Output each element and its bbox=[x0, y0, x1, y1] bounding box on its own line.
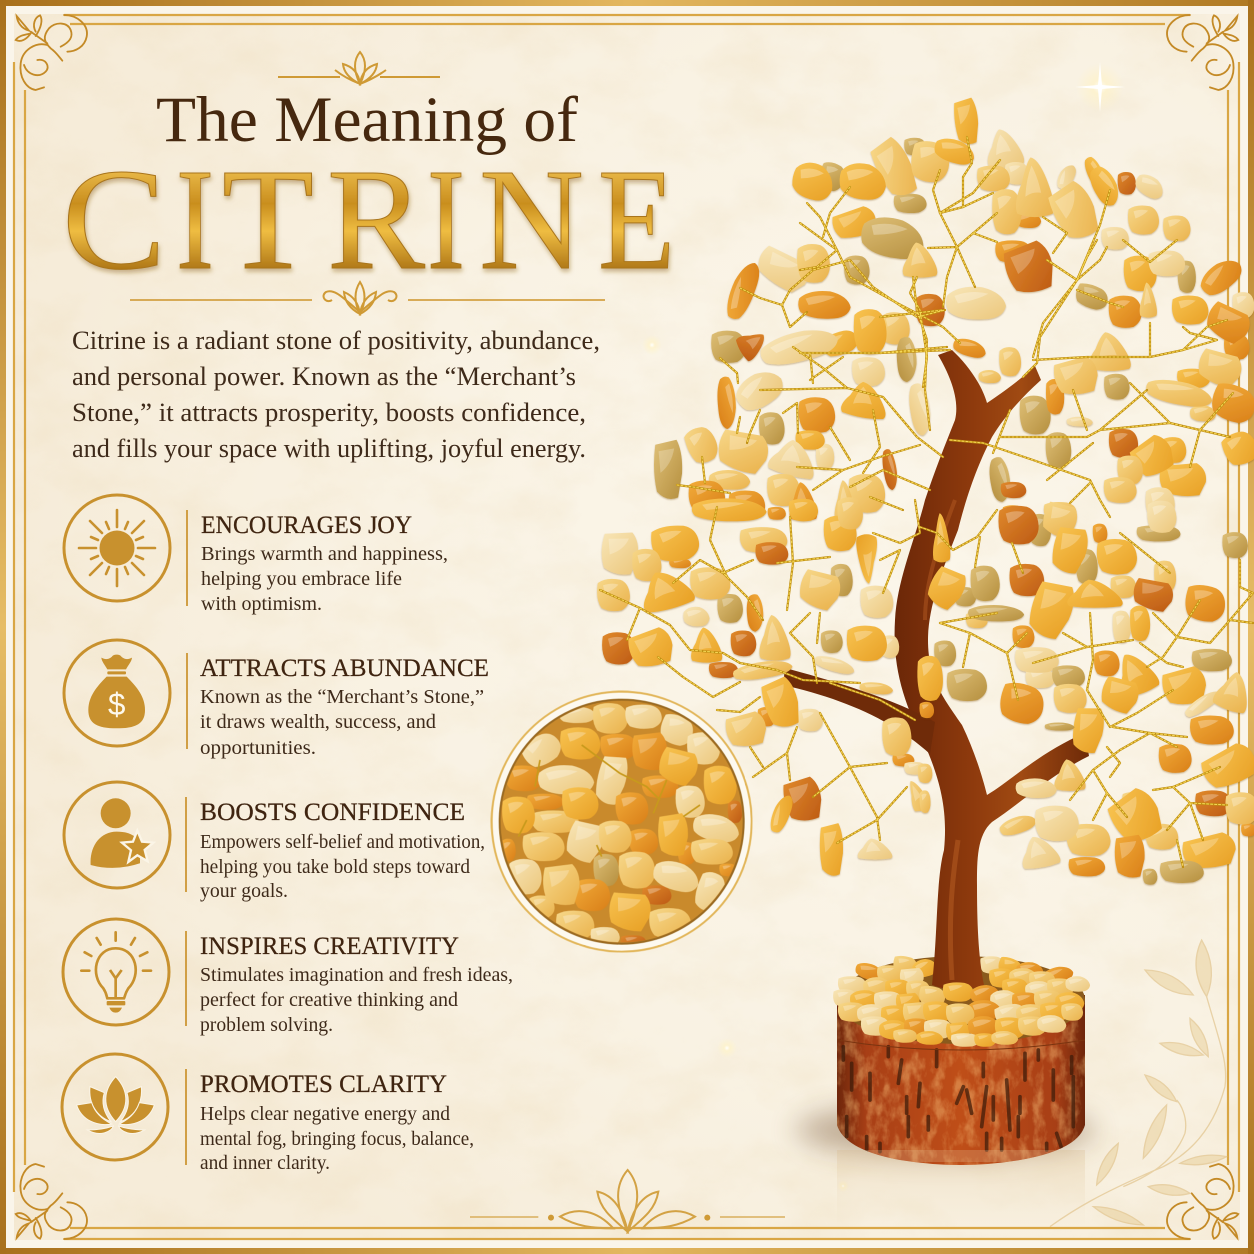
inset circle of citrine stones bbox=[492, 692, 752, 952]
stones: inset front bbox=[502, 703, 742, 946]
tree stones bbox=[597, 97, 1254, 885]
heading: CITRINE: R bbox=[327, 140, 425, 300]
intro paragraph: Citrine is a radiant stone of positivity, abundance, bbox=[72, 326, 600, 355]
icon: money bag: $ bbox=[108, 687, 125, 722]
item: inspires creativity: Stimulates imagination and fresh ideas, bbox=[200, 964, 513, 986]
heading: CITRINE bbox=[62, 140, 675, 300]
sparkles bbox=[642, 62, 1125, 1192]
stones: crown top bbox=[788, 97, 1190, 263]
item: boosts confidence: helping you take bold steps toward bbox=[200, 856, 470, 878]
intro paragraph bbox=[72, 326, 600, 463]
item: encourages joy: Brings warmth and happiness, bbox=[201, 543, 448, 565]
item: attracts abundance bbox=[64, 640, 489, 759]
item: attracts abundance: ATTRACTS ABUNDANCE bbox=[200, 655, 489, 682]
stones: inset back bbox=[501, 707, 742, 948]
icon: sun bbox=[64, 495, 170, 601]
stones: crown upper left bbox=[654, 242, 945, 523]
bottom ornament bbox=[470, 1170, 785, 1232]
intro paragraph: and fills your space with uplifting, joyful energy. bbox=[72, 434, 586, 463]
pot base bbox=[837, 956, 1085, 1170]
divider ornament bbox=[130, 282, 605, 314]
item: inspires creativity: INSPIRES CREATIVITY bbox=[200, 933, 459, 960]
item: boosts confidence: BOOSTS CONFIDENCE bbox=[200, 799, 465, 826]
intro paragraph: and personal power. Known as the “Merchant’s bbox=[72, 362, 576, 391]
trunk bbox=[783, 350, 1089, 990]
item: promotes clarity: and inner clarity. bbox=[200, 1152, 330, 1174]
item: inspires creativity: perfect for creative thinking and bbox=[200, 989, 458, 1011]
gravel front bbox=[833, 982, 1084, 1047]
stones: crown lower right bbox=[917, 498, 1254, 885]
item: promotes clarity bbox=[62, 1054, 474, 1174]
item: encourages joy: ENCOURAGES JOY bbox=[201, 512, 412, 539]
item: attracts abundance: it draws wealth, success, and bbox=[200, 711, 436, 733]
stones: crown lower left bbox=[597, 497, 931, 876]
item: attracts abundance: Known as the “Merchant’s Stone,” bbox=[200, 686, 484, 708]
icon: money bag bbox=[64, 640, 170, 746]
top ornament bbox=[278, 52, 440, 84]
heading: CITRINE: N bbox=[479, 140, 584, 300]
icon: lotus bbox=[62, 1054, 168, 1160]
item: encourages joy: helping you embrace life bbox=[201, 568, 402, 590]
heading: CITRINE: I bbox=[176, 140, 214, 300]
icon: person with star bbox=[64, 782, 170, 888]
stones: crown upper right bbox=[946, 238, 1254, 521]
heading: CITRINE: C bbox=[62, 140, 166, 300]
shadow and reflection under base bbox=[795, 1104, 1095, 1230]
heading: CITRINE: T bbox=[222, 140, 314, 300]
icon: light bulb bbox=[63, 919, 169, 1025]
decorative vine leaves bbox=[1050, 940, 1227, 1227]
heading: CITRINE: I bbox=[427, 140, 465, 300]
item: promotes clarity: mental fog, bringing focus, balance, bbox=[200, 1128, 474, 1150]
item: boosts confidence: your goals. bbox=[200, 880, 288, 902]
gold wires bbox=[600, 137, 1253, 867]
item: promotes clarity: Helps clear negative energy and bbox=[200, 1103, 450, 1125]
title: The Meaning of bbox=[156, 84, 578, 156]
item: promotes clarity: PROMOTES CLARITY bbox=[200, 1071, 447, 1098]
heading: CITRINE: E bbox=[598, 140, 675, 300]
item: encourages joy: with optimism. bbox=[201, 593, 322, 615]
item: attracts abundance: opportunities. bbox=[200, 737, 316, 759]
intro paragraph: Stone,” it attracts prosperity, boosts confidence, bbox=[72, 398, 586, 427]
gravel back bbox=[838, 954, 1090, 1000]
item: encourages joy bbox=[64, 495, 448, 615]
item: boosts confidence: Empowers self-belief and motivation, bbox=[200, 831, 485, 853]
item: inspires creativity bbox=[63, 919, 513, 1036]
item: boosts confidence bbox=[64, 782, 485, 902]
item: inspires creativity: problem solving. bbox=[200, 1014, 333, 1036]
